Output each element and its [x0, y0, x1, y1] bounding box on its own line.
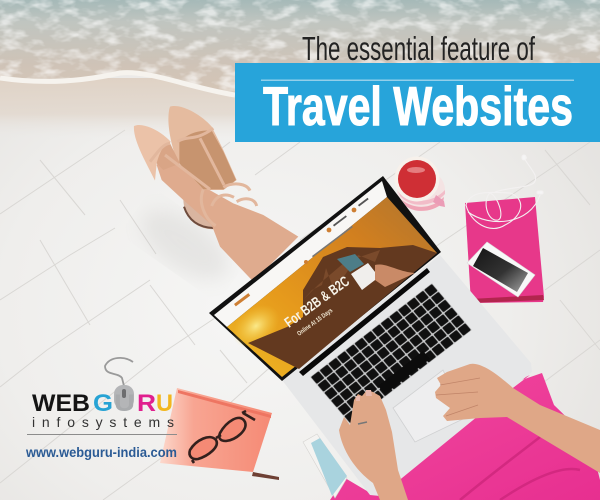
wordmark G: G: [93, 390, 113, 417]
floor planks: [0, 130, 600, 500]
smartphone: [467, 242, 535, 297]
wordmark R: R: [137, 390, 156, 417]
right hand and arm: [435, 364, 600, 473]
screen subheading: Online At 15 Days: [296, 307, 334, 338]
company logo: [25, 358, 177, 460]
laptop lid: [209, 176, 441, 381]
laptop base: [282, 255, 532, 496]
laptop screen header: [214, 181, 387, 327]
wordmark final U: U: [156, 390, 173, 417]
salmon notebook: [160, 388, 279, 480]
website address: www.webguru-india.com: [25, 445, 177, 460]
legs and shoes: [134, 106, 298, 282]
trackpad: [393, 370, 465, 442]
earphones: [466, 155, 543, 228]
sea: [0, 0, 600, 100]
laptop: [209, 176, 532, 496]
tagline: infosystems: [32, 414, 174, 430]
pink dress: [330, 373, 600, 500]
keyboard: [310, 283, 472, 424]
soft shadow under legs: [130, 197, 240, 293]
tea cup: [394, 156, 445, 211]
left hand: [339, 390, 408, 500]
beach sand transition: [0, 78, 600, 138]
mouse icon: [105, 358, 134, 409]
book under laptop: [303, 434, 347, 498]
title banner: [235, 63, 600, 142]
glasses: [189, 411, 255, 463]
laptop screen photo: [224, 197, 437, 377]
hands: [339, 364, 600, 500]
bookmark: [252, 472, 279, 480]
wordmark WEB: WEB: [32, 390, 90, 417]
wordmark U: U: [114, 390, 135, 417]
screen headline: For B2B & B2C: [282, 273, 353, 331]
screen nav marks: [234, 198, 369, 306]
pink notebook: [465, 197, 544, 303]
mug on screen: [351, 263, 379, 290]
